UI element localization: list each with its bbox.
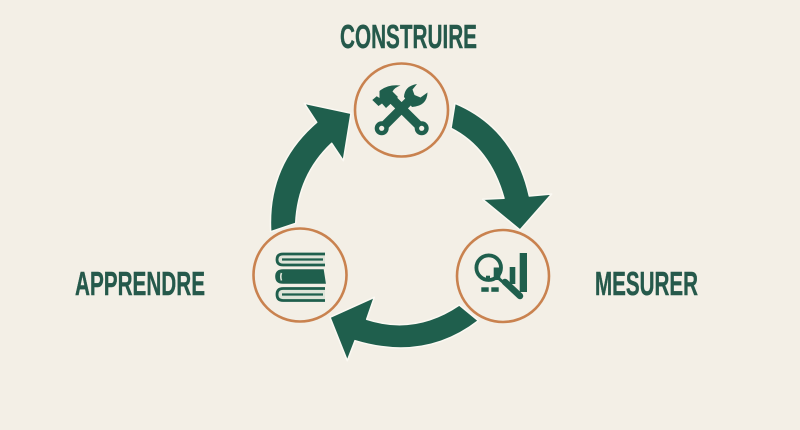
heading: apprendre: APPRENDRE [75, 265, 205, 302]
arrow: apprendre to construire [270, 103, 351, 232]
icon: hammer and wrench [372, 84, 429, 135]
icon: stack of books [276, 254, 325, 300]
ring [457, 230, 549, 322]
arrow: construire to mesurer [451, 103, 552, 230]
icon: magnifier over bars [476, 253, 527, 296]
heading: construire: CONSTRUIRE [340, 18, 477, 55]
node: construire [355, 64, 448, 156]
node: mesurer [457, 230, 549, 322]
heading: mesurer: MESURER [595, 265, 698, 302]
node: apprendre [254, 228, 346, 322]
ring [254, 228, 346, 322]
arrow: mesurer to apprendre [330, 297, 478, 361]
ring [355, 64, 448, 156]
